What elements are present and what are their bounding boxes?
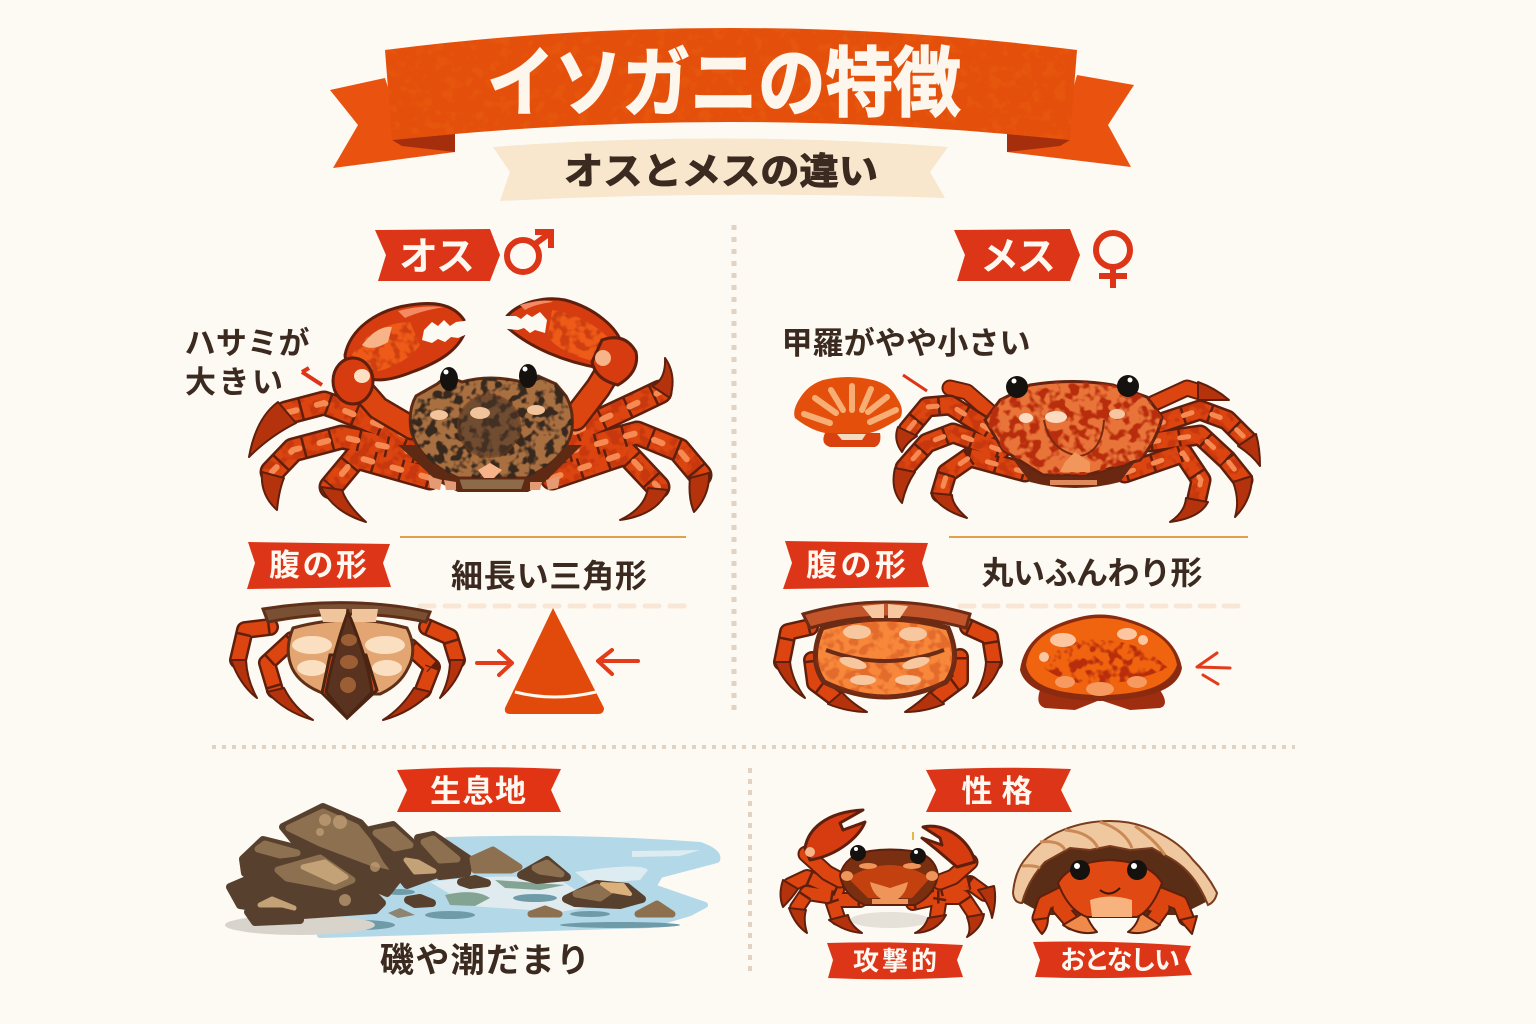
arrow lines beside round shape [1197,653,1230,684]
label: male abdomen shape: 腹の形 [269,548,367,583]
eyes [1006,375,1139,398]
left arm and claw [333,304,472,428]
right arm and claw [498,299,637,418]
subtitle ribbon [493,138,948,201]
heading: female [954,229,1130,288]
heading: female: メス [980,236,1056,279]
panel: temperament [780,768,1217,979]
label: gentle [1033,942,1192,978]
icon: round shape [1020,614,1182,710]
label: female abdomen shape [783,541,929,589]
dotted vertical divider top [732,225,736,716]
heading: male [375,229,551,281]
illustration: rocky shore and tide pools [225,807,717,935]
illustration: female crab [894,375,1260,522]
illustration: male crab [249,299,709,522]
illustration: shy hermit crab [1013,821,1217,934]
callout: large claws [184,326,322,400]
icon: female symbol [1096,233,1130,288]
panel: habitat [225,767,717,980]
illustration: male crab underside [231,603,464,720]
carapace [1010,455,1140,488]
illustration: female crab underside [775,602,1001,712]
subtitle text: オスとメスの違い [564,151,878,192]
text: round shape: 丸いふんわり形 [982,555,1202,591]
arrows pointing at triangle [477,650,638,675]
heading: male: オス [399,236,475,279]
callout: large claws: 大きい [185,365,283,400]
icon: narrow triangle [505,608,604,714]
callout: smaller carapace [782,326,1030,391]
title banner [330,28,1134,168]
text: rocky shores and tide pools: 磯や潮だまり [380,942,590,980]
label: temperament [926,768,1072,812]
eyes [440,364,537,391]
callout: smaller carapace: 甲羅がやや小さい [782,326,1030,361]
illustration: aggressive crab [780,810,995,937]
title text: イソガニの特徴 [487,42,961,127]
label: female abdomen shape: 腹の形 [806,548,906,583]
icon: male symbol [507,232,551,272]
callout: large claws: ハサミが [184,326,310,361]
label: temperament: 性格 [962,774,1032,809]
label: aggressive: 攻撃的 [853,946,937,976]
label: aggressive [827,942,963,979]
label: male abdomen shape [247,542,391,589]
label: gentle: おとなしい [1060,945,1180,975]
label: habitat [397,767,561,812]
label: habitat: 生息地 [430,774,526,809]
text: narrow triangle: 細長い三角形 [451,558,647,594]
icon: scallop shell [794,377,902,447]
carapace [398,445,582,492]
